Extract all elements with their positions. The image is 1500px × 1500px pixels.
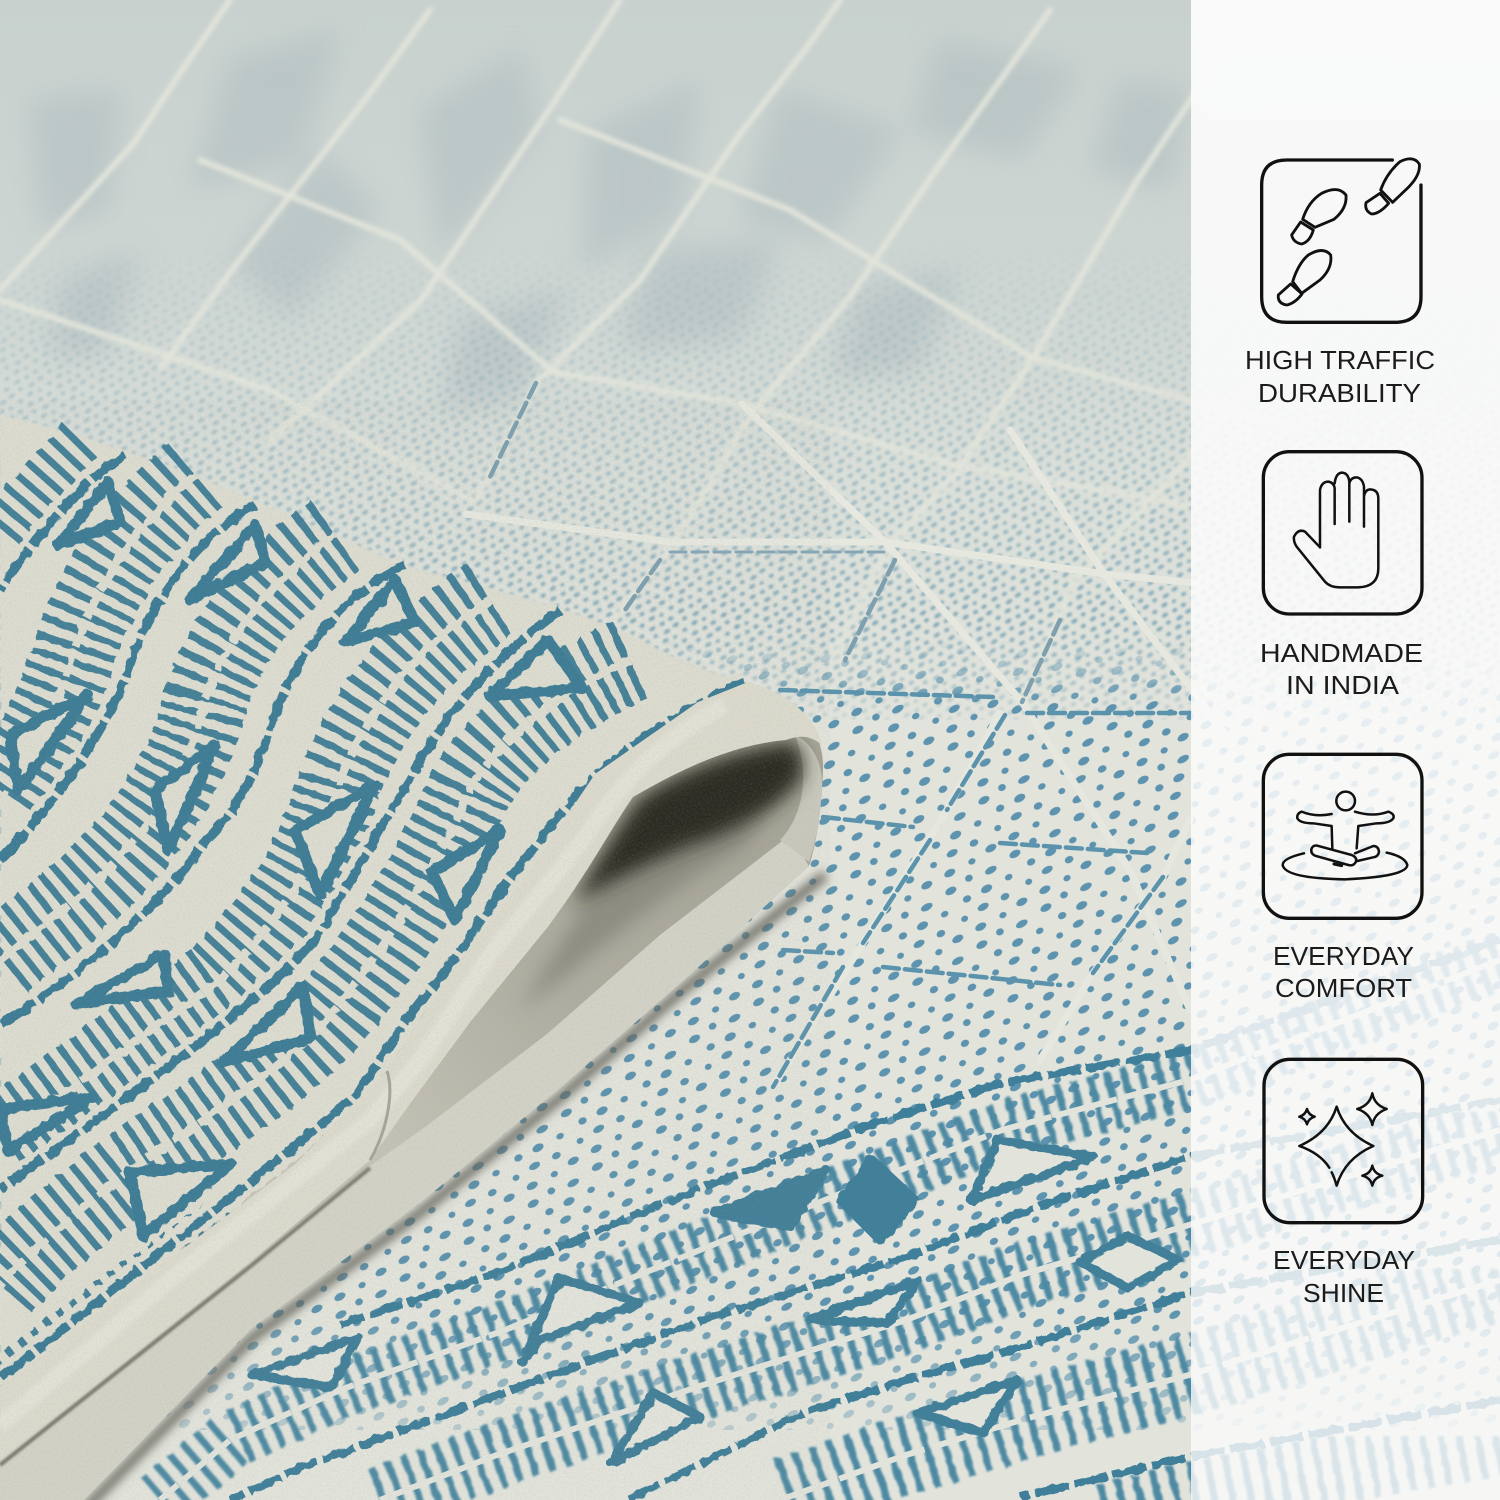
label: HIGH TRAFFIC bbox=[1245, 345, 1435, 375]
pocket rim bbox=[780, 735, 822, 862]
label: EVERYDAY bbox=[1273, 941, 1414, 971]
woven motif on top surface bbox=[0, 440, 745, 1379]
arc halo separating hatch from lines bbox=[0, 455, 745, 1379]
icon: footprints bbox=[1262, 159, 1421, 322]
lower binding ridge bbox=[0, 835, 809, 1500]
floor border lines bbox=[230, 940, 1500, 1500]
soft tint of out-of-focus upper rug cells bbox=[30, 30, 1190, 410]
seam between layers bbox=[0, 1168, 370, 1465]
binding highlight bbox=[0, 705, 725, 1425]
triangle motifs bbox=[0, 482, 582, 1236]
label: SHINE bbox=[1303, 1278, 1384, 1308]
label bbox=[1273, 941, 1414, 1003]
pocket midtone bbox=[520, 810, 770, 1010]
rug top surface bbox=[0, 415, 748, 1387]
blurred upper lattice lines bbox=[0, 0, 1300, 702]
label: IN INDIA bbox=[1286, 670, 1400, 700]
label bbox=[1273, 1245, 1415, 1308]
dark pocket interior bbox=[572, 742, 803, 905]
floor border hatch bands bbox=[160, 960, 1500, 1500]
contact shadow under the fold bbox=[84, 875, 825, 1500]
blue lattice accents bbox=[490, 383, 1190, 1087]
small dot field bbox=[0, 240, 1500, 720]
feature: everyday shine bbox=[1264, 1059, 1423, 1308]
cream breaks through hatch bbox=[160, 960, 1500, 1500]
label bbox=[1260, 638, 1423, 700]
white feature panel bbox=[1191, 0, 1500, 1500]
feature: handmade in india bbox=[1260, 452, 1423, 700]
floor border triangle motifs bbox=[252, 1140, 1178, 1463]
label bbox=[1245, 345, 1435, 408]
icon: hand bbox=[1263, 452, 1422, 614]
feature: everyday comfort bbox=[1263, 754, 1422, 1003]
binding edge of the fold bbox=[0, 682, 822, 1463]
hatch bands bbox=[0, 440, 630, 1375]
label: HANDMADE bbox=[1260, 638, 1423, 668]
binding seam bbox=[370, 1071, 390, 1160]
lower lattice lines bbox=[466, 404, 1230, 1087]
cream breaks through hatch bbox=[0, 475, 630, 1285]
folded rug roll bbox=[0, 400, 830, 1500]
icon: meditating figure bbox=[1263, 754, 1422, 918]
feature: high traffic durability bbox=[1245, 159, 1435, 408]
fabric grain bbox=[0, 400, 830, 1500]
icon: sparkles bbox=[1264, 1059, 1423, 1223]
underside flap bbox=[0, 682, 823, 1500]
arc lines bbox=[0, 455, 745, 1379]
medium dot field bbox=[0, 640, 1500, 1430]
label: COMFORT bbox=[1275, 973, 1412, 1003]
label: DURABILITY bbox=[1258, 378, 1421, 408]
label: EVERYDAY bbox=[1273, 1245, 1415, 1275]
